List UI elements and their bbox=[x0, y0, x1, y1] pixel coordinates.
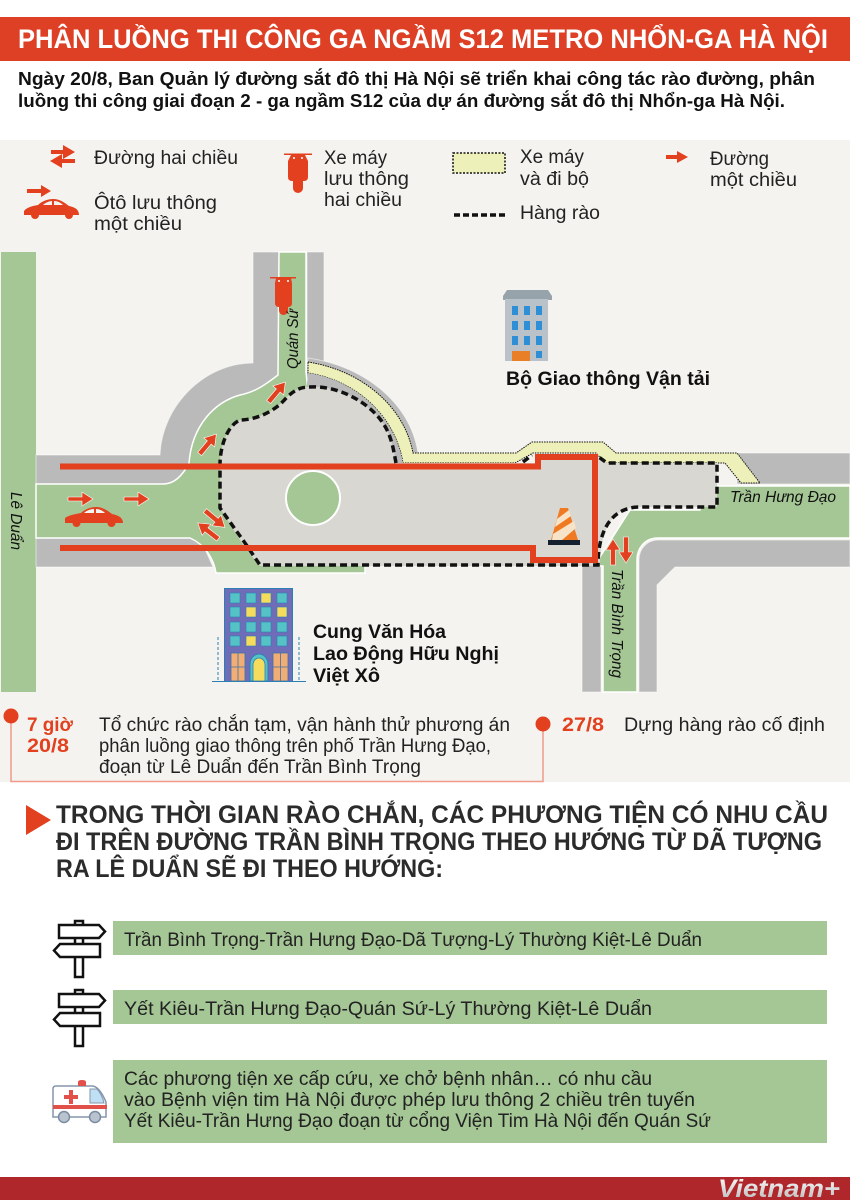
legend label: one-way car: Ôtô lưu thông bbox=[94, 192, 217, 214]
inner grey band bbox=[300, 373, 403, 464]
route 2: Yết Kiêu-Trần Hưng Đạo-Quán Sứ-Lý Thường Kiệt-Lê Duẩn bbox=[124, 999, 652, 1020]
note on emergency vehicles: Các phương tiện xe cấp cứu, xe chở bệnh nhân… có nhu cầu bbox=[124, 1069, 652, 1090]
date: 7 giờ 20/8: 20/8 bbox=[27, 736, 69, 757]
icon: ambulance bbox=[53, 1080, 107, 1122]
event text 1: đoạn từ Lê Duẩn đến Trần Bình Trọng bbox=[99, 757, 421, 778]
road: Lê Duẩn bbox=[1, 252, 36, 692]
intro text: luồng thi công giai đoạn 2 - ga ngầm S12 của dự án đường sắt đô thị Nhổn-ga Hà Nội. bbox=[18, 90, 785, 111]
legend label: one-way road: Đường bbox=[710, 149, 769, 170]
event text 2: Dựng hàng rào cố định bbox=[624, 715, 825, 736]
note on emergency vehicles: vào Bệnh viện tim Hà Nội được phép lưu thông 2 chiều trên tuyến bbox=[124, 1090, 695, 1111]
fence dashed outline bbox=[220, 387, 717, 565]
grey sidewalks bbox=[36, 252, 850, 692]
date: 27/8: 27/8 bbox=[562, 715, 604, 736]
note on emergency vehicles: Yết Kiêu-Trần Hưng Đạo đoạn từ cổng Viện Tim Hà Nội đến Quán Sứ bbox=[124, 1111, 711, 1132]
legend label: motorbike and walking bbox=[520, 147, 589, 190]
legend label: motorbike two-way: Xe máy bbox=[324, 148, 387, 169]
intro text: Ngày 20/8, Ban Quản lý đường sắt đô thị Hà Nội sẽ triển khai công tác rào đường, phân bbox=[18, 68, 815, 89]
title banner bbox=[0, 17, 850, 61]
icon: two-way arrows bbox=[50, 145, 75, 168]
street label: Quán Sứ: Quán Sứ bbox=[285, 307, 302, 369]
route 1 bbox=[113, 921, 827, 955]
intro text bbox=[18, 68, 815, 111]
icon: palace building bbox=[212, 588, 306, 682]
label: Ministry of Transport: Bộ Giao thông Vận tải bbox=[506, 369, 710, 390]
legend label: motorbike two-way bbox=[324, 148, 409, 211]
date: 7 giờ 20/8: 7 giờ bbox=[27, 715, 73, 736]
footer bbox=[0, 1175, 850, 1200]
legend label: motorbike and walking: Xe máy bbox=[520, 147, 584, 168]
title banner: PHÂN LUỒNG THI CÔNG GA NGẦM S12 METRO NHỔN-GA HÀ NỘI bbox=[18, 23, 828, 54]
route 1: Trần Bình Trọng-Trần Hưng Đạo-Dã Tượng-Lý Thường Kiệt-Lê Duẩn bbox=[124, 930, 702, 951]
icon: signpost 1 bbox=[54, 921, 105, 977]
street label: Lê Duẩn: Lê Duẩn bbox=[7, 492, 25, 550]
legend label: one-way car: một chiều bbox=[94, 214, 182, 235]
section heading: ĐI TRÊN ĐƯỜNG TRẦN BÌNH TRỌNG THEO HƯỚNG TỪ DÃ TƯỢNG bbox=[56, 826, 822, 856]
panel: map background bbox=[0, 140, 850, 782]
label: Cultural Palace: Cung Văn Hóa bbox=[313, 622, 446, 643]
red construction barrier bbox=[60, 457, 595, 560]
icon: heading triangle bbox=[26, 805, 51, 835]
icon: car with arrow bbox=[24, 185, 79, 219]
timeline dot 2 bbox=[536, 716, 550, 732]
icon: car on map bbox=[65, 507, 123, 527]
yellow motorbike and pedestrian lane bbox=[308, 362, 760, 483]
legend label: motorbike and walking: và đi bộ bbox=[520, 169, 589, 190]
roundabout bbox=[286, 471, 340, 525]
icon: motorbike on map bbox=[270, 277, 296, 315]
green roadway bbox=[36, 252, 850, 692]
icon: one-way arrow bbox=[666, 151, 688, 163]
legend label: fence: Hàng rào bbox=[520, 203, 600, 224]
route 2 bbox=[113, 990, 827, 1024]
construction zone bbox=[220, 387, 717, 566]
timeline bbox=[4, 708, 825, 782]
street label: Trần Hưng Đạo: Trần Hưng Đạo bbox=[730, 489, 836, 506]
event text 1: Tổ chức rào chắn tạm, vận hành thử phương án bbox=[99, 714, 510, 736]
traffic arrows bbox=[68, 378, 633, 565]
legend label: one-way road: một chiều bbox=[710, 170, 797, 191]
label: Cultural Palace: Việt Xô bbox=[313, 666, 380, 687]
icon: ministry building bbox=[503, 290, 552, 361]
event text 1 bbox=[99, 714, 510, 778]
icon: fence dashed line bbox=[454, 213, 505, 217]
icon: traffic cone bbox=[548, 508, 580, 545]
label: Cultural Palace bbox=[313, 622, 499, 687]
legend label: two-way road: Đường hai chiều bbox=[94, 148, 238, 169]
street label: Trần Bình Trọng: Trần Bình Trọng bbox=[608, 569, 625, 678]
event text 1: phân luồng giao thông trên phố Trần Hưng Đạo, bbox=[99, 736, 491, 757]
icon: yellow zone bbox=[453, 153, 505, 173]
section heading: TRONG THỜI GIAN RÀO CHẮN, CÁC PHƯƠNG TIỆN CÓ NHU CẦU bbox=[56, 799, 828, 829]
legend label: motorbike two-way: hai chiều bbox=[324, 190, 402, 211]
icon: motorbike bbox=[284, 154, 312, 193]
timeline connector bbox=[11, 716, 543, 782]
icon: signpost 2 bbox=[54, 990, 105, 1046]
section heading: RA LÊ DUẨN SẼ ĐI THEO HƯỚNG: bbox=[56, 853, 443, 883]
date: 7 giờ 20/8 bbox=[27, 715, 73, 757]
legend label: one-way car bbox=[94, 192, 217, 235]
legend label: motorbike two-way: lưu thông bbox=[324, 169, 409, 190]
label: Cultural Palace: Lao Động Hữu Nghị bbox=[313, 644, 499, 665]
note on emergency vehicles bbox=[113, 1060, 827, 1143]
timeline dot 1 bbox=[4, 708, 18, 724]
legend bbox=[24, 145, 797, 235]
legend label: one-way road bbox=[710, 149, 797, 191]
map bbox=[1, 252, 850, 692]
section heading bbox=[56, 799, 828, 883]
